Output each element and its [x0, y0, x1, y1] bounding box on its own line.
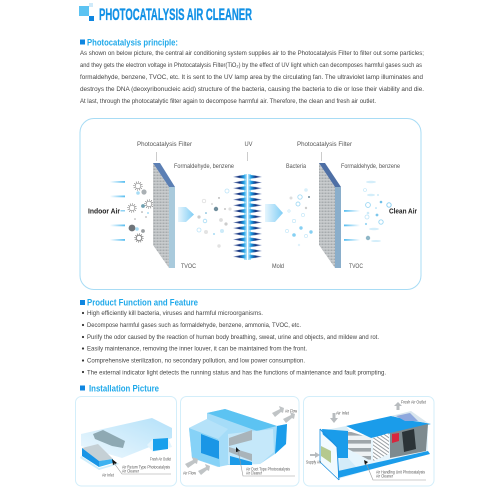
icon: particles after filter — [197, 189, 232, 248]
arrow: large arrow to filter — [265, 204, 283, 222]
feature list: The external indicator light detects the running status and has the functions of maintenance and fault prompting. — [87, 370, 386, 376]
label: fresh air outlet: Fresh Air Outlet — [401, 400, 427, 404]
text block: principle paragraph: As shown on below picture, the central air conditioning system supplies air to the Photocatalysis Filter to filter out some particles; — [80, 50, 424, 57]
callout: air handling unit: Air Cleaner — [376, 474, 393, 479]
panel: process diagram — [80, 118, 421, 290]
heading: Product Function and Feature — [87, 298, 198, 308]
text block: principle paragraph — [80, 50, 424, 105]
label: clean air: Clean Air — [389, 206, 417, 216]
text block: principle paragraph: formaldehyde, benzene, TVOC, etc. It is sent to the UV lamp area by the circulating fan. The ultraviolet lamp illuminates and — [80, 74, 423, 81]
label: photocatalysis filter right: Photocatalysis Filter — [297, 141, 353, 148]
panel: air duct type cleaner — [180, 396, 299, 486]
feature list: Comprehensive sterilization, no secondary pollution, and low power consumption. — [87, 358, 305, 364]
icon: title squares — [79, 3, 94, 21]
heading: Photocatalysis principle: — [87, 38, 178, 48]
icon: bacteria bubbles — [285, 188, 313, 246]
section: product function and feature — [80, 298, 386, 376]
callout: air duct type: Air Duct Type Photocatalysis — [246, 466, 290, 471]
text block: principle paragraph: destroys the DNA (deoxyribonucleic acid) structure of the bacteria, causing the bacteria to die or lose their viability and die. — [80, 86, 424, 93]
icon: dirty particles — [128, 182, 162, 242]
label: photocatalysis filter right — [297, 141, 353, 161]
callout: air return type: Air Cleaner — [122, 468, 139, 474]
feature list: High efficiently kill bacteria, viruses and harmful microorganisms. — [87, 310, 263, 317]
label: photocatalysis filter left — [137, 141, 193, 161]
panel: air handling unit cleaner — [304, 396, 434, 486]
callout: air duct type — [236, 447, 295, 476]
title text: PHOTOCATALYSIS AIR CLEANER — [99, 6, 252, 24]
arrow: large arrow to UV — [178, 207, 194, 222]
icon: right photocatalysis filter — [319, 163, 341, 268]
icon: left photocatalysis filter — [153, 163, 175, 268]
label: TVOC left: TVOC — [181, 263, 196, 270]
illustration: air duct — [189, 409, 287, 467]
label: fresh air outlet: Fresh Air Outlet — [150, 456, 172, 462]
section: photocatalysis principle — [80, 38, 424, 105]
arrow: supply air — [310, 452, 320, 458]
label: bacteria: Bacteria — [286, 163, 306, 170]
label: UV — [244, 141, 253, 161]
title — [79, 3, 252, 24]
label: air flow lower: Air Flow — [183, 470, 197, 476]
label: air inlet: Air Inlet — [336, 410, 350, 416]
callout: air handling unit: Air Handling Unit Photocatalysis — [376, 470, 425, 474]
label: photocatalysis filter left: Photocatalysis Filter — [137, 141, 193, 148]
icon: UV lamp — [233, 174, 262, 260]
arrow: air inlet — [330, 413, 338, 423]
label: UV: UV — [244, 141, 253, 148]
feature list: Purify the odor caused by the reaction of human body breathing, sweat, urine and objects, and mildew and rot. — [87, 334, 379, 341]
label: supply air: Supply Air — [306, 460, 321, 464]
arrows: indoor air streaks — [110, 181, 125, 241]
callout: air return type — [112, 459, 171, 474]
illustration: air handling unit — [320, 411, 431, 480]
callout: air duct type: Air Cleaner — [246, 471, 262, 476]
label: air inlet: Air Inlet — [102, 472, 115, 478]
label: mold: Mold — [272, 263, 284, 270]
arrows: clean air streaks — [344, 210, 360, 241]
label: TVOC right: TVOC — [349, 263, 363, 270]
label: indoor air: Indoor Air — [88, 206, 120, 216]
section: installation picture heading: Installation Picture — [89, 384, 159, 394]
arrow: fresh air outlet — [394, 402, 402, 410]
text block: principle paragraph: At last, through the photocatalytic filter again to decompose harmful air. Therefore, the clean and fresh air outlet. — [80, 98, 376, 105]
icon: clean air bubbles — [364, 181, 391, 242]
text block: principle paragraph: and they gets the electron voltage in Photocatalysis Filter(TiO₂) by the effect of UV light which can decomposes harmful gases such as — [80, 62, 422, 69]
illustration: return duct — [80, 418, 172, 470]
panel: air return type cleaner — [76, 396, 176, 486]
feature list: Easily maintenance, removing the inner louver, it can be maintained from the front. — [87, 346, 307, 352]
callout: air return type: Air Return Type Photocatalysis — [122, 464, 170, 470]
callout: air handling unit — [364, 460, 426, 480]
arrows: air flow grey — [185, 406, 295, 475]
label: formaldehyde benzene left: Formaldehyde, benzene — [174, 163, 234, 170]
feature list — [82, 310, 386, 376]
label: formaldehyde benzene right: Formaldehyde, benzene — [341, 163, 400, 170]
label: air flow upper: Air Flow — [285, 408, 298, 414]
feature list: Decompose harmful gases such as formaldehyde, benzene, ammonia, TVOC, etc. — [87, 322, 301, 329]
